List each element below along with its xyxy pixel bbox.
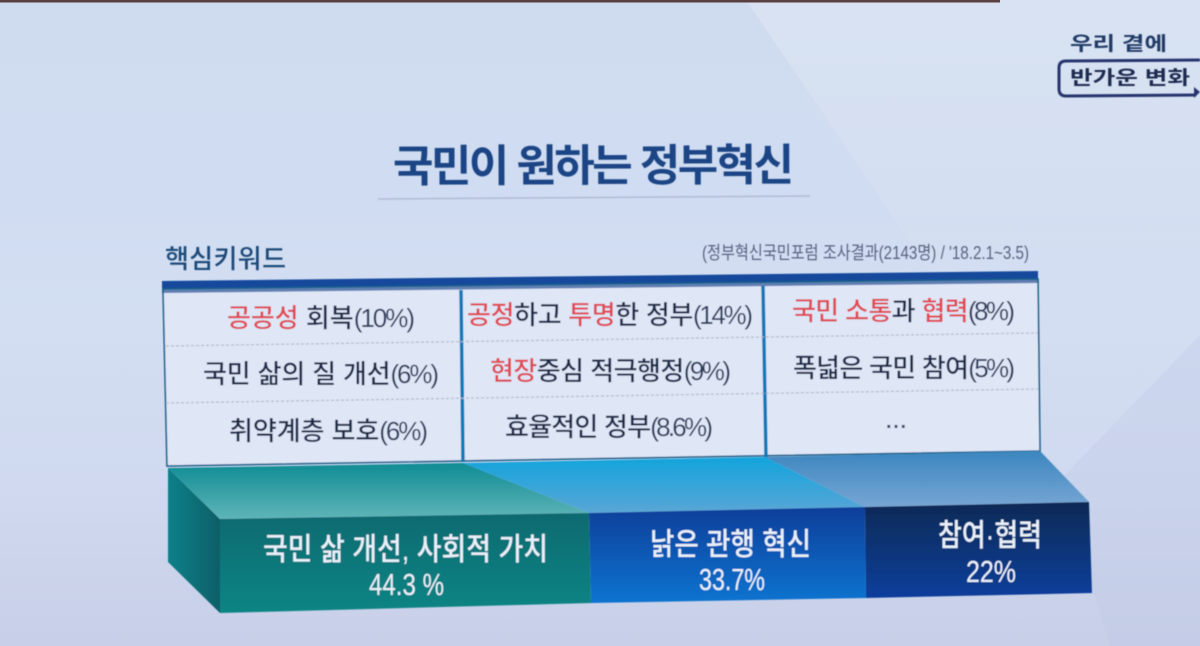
cell: fair and transparent government: 공정하고 투명한 정부(14%) <box>467 300 752 330</box>
cell: efficient government: 효율적인 정부(8.6%) <box>505 412 712 442</box>
top-right slogan logo <box>1059 33 1200 98</box>
cell: field-centered administration: 현장중심 적극행정(9%) <box>490 356 730 386</box>
table body <box>163 276 1040 466</box>
cell: protecting the vulnerable: 취약계층 보호(6%) <box>229 416 427 446</box>
title: 국민이 원하는 정부혁신 <box>393 141 794 192</box>
section label: key keywords: 핵심키워드 <box>165 244 286 274</box>
slogan first line: 우리 곁에 <box>1070 33 1167 55</box>
segment: old practices 33.7% <box>589 507 866 603</box>
slogan box <box>1059 60 1200 96</box>
segment label: 참여·협력 <box>938 518 1042 553</box>
slogan arrow <box>1194 87 1200 98</box>
segment value: 33.7% <box>699 562 765 597</box>
segment: citizen life 44.3% <box>220 513 591 613</box>
segment label: 국민 삶 개선, 사회적 가치 <box>263 532 548 567</box>
top face: blue <box>463 457 865 513</box>
top face: navy <box>765 451 1089 507</box>
cell: quality of life: 국민 삶의 질 개선(6%) <box>203 359 438 389</box>
table top bar <box>162 271 1038 289</box>
title underline <box>378 196 810 199</box>
segment value: 22% <box>966 554 1016 589</box>
cell: ellipsis: ... <box>886 411 906 433</box>
cell: broad citizen participation: 폭넓은 국민 참여(5%) <box>793 353 1014 383</box>
slogan second line: 반가운 변화 <box>1070 67 1190 89</box>
table outline <box>163 279 1040 466</box>
column dividers <box>461 286 766 462</box>
top bar lower shading <box>162 279 1038 293</box>
bar side face <box>168 468 220 613</box>
segment value: 44.3 % <box>369 567 444 602</box>
source note: (정부혁신국민포럼 조사결과(2143명) / '18.2.1~3.5) <box>702 243 1029 263</box>
keyword table <box>162 271 1040 466</box>
row dividers <box>166 333 1038 403</box>
segment: participation 22% <box>865 502 1092 598</box>
top face: teal <box>168 463 589 519</box>
cell: citizen communication and cooperation: 국민 소통과 협력(8%) <box>792 296 1014 326</box>
cell: public value recovery: 공공성 회복(10%) <box>227 303 414 333</box>
3D stacked bar <box>168 451 1092 613</box>
segment label: 낡은 관행 혁신 <box>650 527 811 562</box>
